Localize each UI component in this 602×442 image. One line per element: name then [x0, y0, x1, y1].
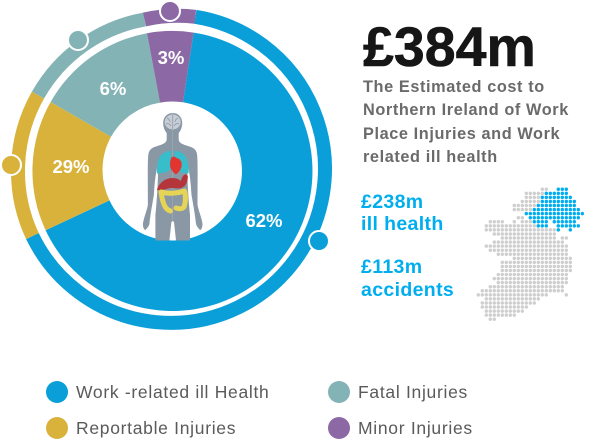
- icon part: silhouette: [143, 113, 202, 240]
- stat: ill health: ill health: [361, 213, 444, 235]
- stat: accidents: £113m: [361, 256, 422, 278]
- stat: accidents: accidents: [361, 279, 454, 301]
- stat: accidents: [361, 256, 454, 301]
- chart: outer ring: [18, 16, 325, 323]
- headline: £384m: £384m: [363, 16, 536, 78]
- label: 6%: 6%: [100, 78, 126, 99]
- marker: fatal injuries: [68, 30, 88, 50]
- label: 29%: 29%: [52, 156, 90, 177]
- text block: description: [363, 78, 569, 166]
- text block: description: related ill health: [363, 148, 498, 166]
- icon: human body with organs: [143, 113, 202, 240]
- stat: ill health: [361, 191, 444, 235]
- marker: reportable injuries: [1, 155, 21, 175]
- icon part: intestines: [161, 191, 185, 211]
- legend: reportable injuries: Reportable Injuries: [76, 418, 236, 438]
- icon part: lungs: [157, 150, 189, 174]
- legend: minor injuries: Minor Injuries: [358, 418, 473, 438]
- legend: work-related ill health: Work -related ill Health: [76, 382, 269, 402]
- text block: description: Place Injuries and Work: [363, 125, 561, 143]
- legend: fatal injuries: Fatal Injuries: [358, 382, 468, 402]
- text block: description: Northern Ireland of Work: [363, 101, 569, 119]
- stat: ill health: £238m: [361, 191, 423, 213]
- icon part: brain: [165, 114, 181, 130]
- label: 3%: 3%: [158, 47, 184, 68]
- chart: donut segments: [32, 31, 312, 311]
- icon part: heart: [170, 157, 182, 174]
- marker: work-related ill health: [309, 231, 329, 251]
- text block: description: The Estimated cost to: [363, 78, 545, 96]
- map: dotted Ireland: [478, 189, 582, 319]
- icon part: liver and stomach: [157, 174, 188, 190]
- map: Northern Ireland dots: [526, 189, 582, 230]
- map: rest of Ireland dots: [478, 189, 570, 319]
- marker: minor injuries: [160, 1, 180, 21]
- label: 62%: 62%: [245, 210, 283, 231]
